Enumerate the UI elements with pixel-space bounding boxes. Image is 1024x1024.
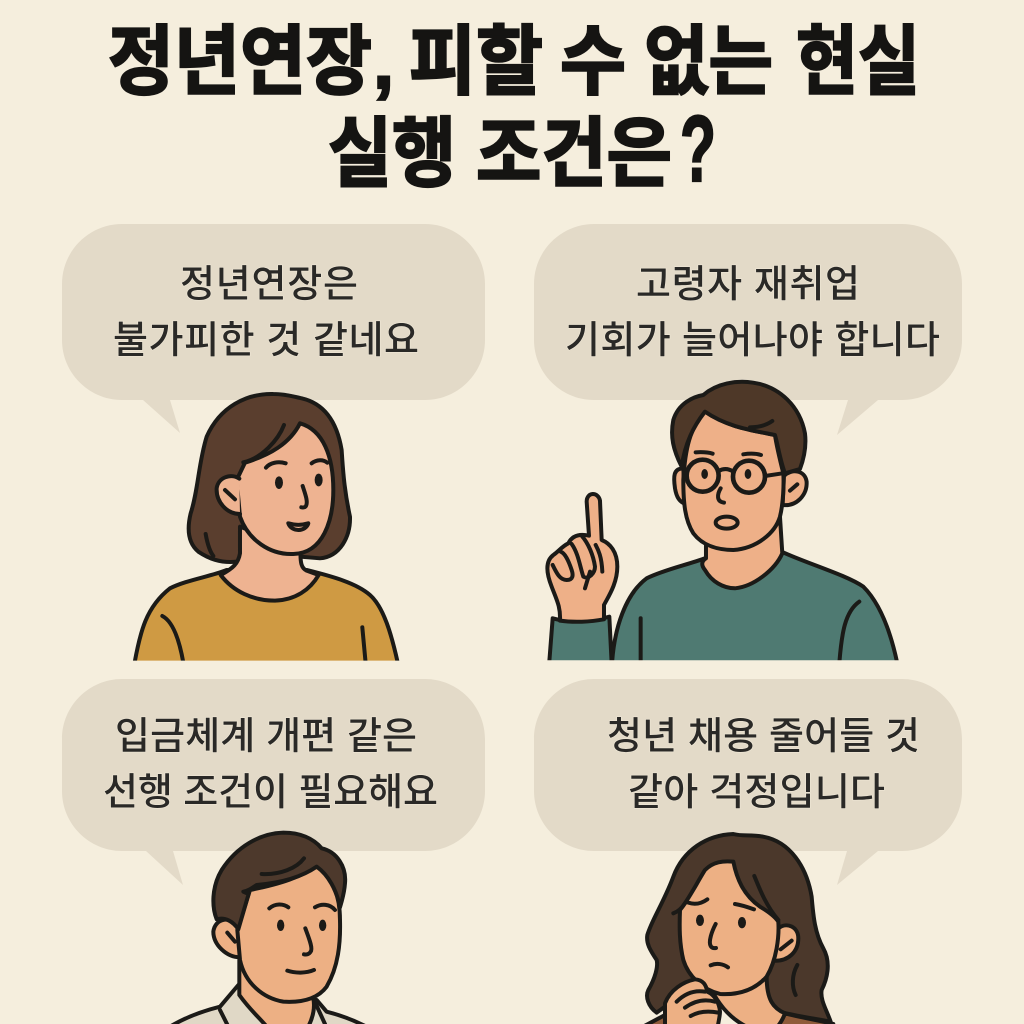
title: ,	[373, 20, 394, 105]
shirt	[170, 985, 367, 1024]
sweater right	[773, 1013, 833, 1024]
hair strand	[243, 425, 284, 462]
face	[237, 867, 340, 1002]
sleeve folds	[162, 616, 184, 667]
hand	[547, 494, 617, 622]
sweater left	[640, 1015, 665, 1024]
character: woman with bob hair and mustard sweater	[133, 394, 399, 670]
title: ?	[680, 96, 716, 201]
eyebrows, eyes, nose, mouth	[688, 899, 707, 904]
speech bubble: bottom left	[62, 679, 485, 885]
title: 수	[560, 20, 626, 105]
eyebrows, eyes, nose, mouth	[696, 452, 713, 454]
title: 없는	[644, 20, 773, 105]
title: 실행	[328, 112, 456, 197]
hand on chin	[665, 979, 720, 1024]
speech bubble: bottom right: 청년 채용 줄어들 것	[607, 716, 920, 758]
ear	[773, 925, 798, 961]
hair	[647, 834, 831, 1022]
right ear	[783, 471, 807, 505]
title: 정년연장	[108, 20, 372, 105]
character: worried woman with long wavy hair	[640, 834, 833, 1024]
hair	[672, 382, 805, 473]
face	[683, 412, 784, 550]
character: man with glasses raising a finger	[547, 382, 899, 670]
speech bubble: bottom right: 같아 걱정입니다	[628, 772, 885, 814]
speech bubble: top left: 정년연장은	[180, 264, 358, 306]
title: 피할	[409, 20, 543, 105]
speech bubble: top right: 기회가 늘어나야 합니다	[565, 320, 940, 362]
left ear	[674, 468, 685, 504]
ear	[217, 476, 240, 514]
neck	[713, 977, 785, 1024]
speech bubble: bottom left: 입금체계 개편 같은	[115, 716, 417, 758]
speech bubble: top right: 고령자 재취업	[636, 264, 860, 306]
sweater	[133, 570, 399, 670]
sweater	[612, 552, 899, 670]
character: man with short hair and collared shirt	[170, 833, 367, 1024]
speech bubble: bottom right	[534, 679, 962, 885]
eyebrows, eyes, nose, mouth	[266, 462, 286, 468]
finger lines	[553, 552, 573, 580]
collar lines	[220, 1010, 228, 1024]
face	[237, 423, 333, 554]
sleeve cuff	[547, 614, 612, 660]
face	[680, 861, 779, 994]
title	[108, 20, 920, 201]
speech bubble: top left: 불가피한 것 같네요	[113, 320, 419, 362]
neck	[239, 953, 337, 1024]
ear	[213, 920, 242, 957]
neck	[221, 527, 319, 601]
glasses	[687, 460, 783, 493]
neck	[702, 517, 782, 588]
sleeve folds	[638, 616, 643, 660]
hair	[213, 833, 345, 929]
hair	[189, 394, 350, 562]
title: 조건은	[476, 112, 672, 197]
speech bubble: top right	[534, 224, 962, 435]
hair strands	[673, 903, 685, 913]
speech bubble: top left	[62, 224, 485, 433]
title: 현실	[796, 20, 920, 105]
eyebrows, eyes, nose, mouth	[269, 904, 288, 908]
speech bubble: bottom left: 선행 조건이 필요해요	[103, 772, 438, 814]
